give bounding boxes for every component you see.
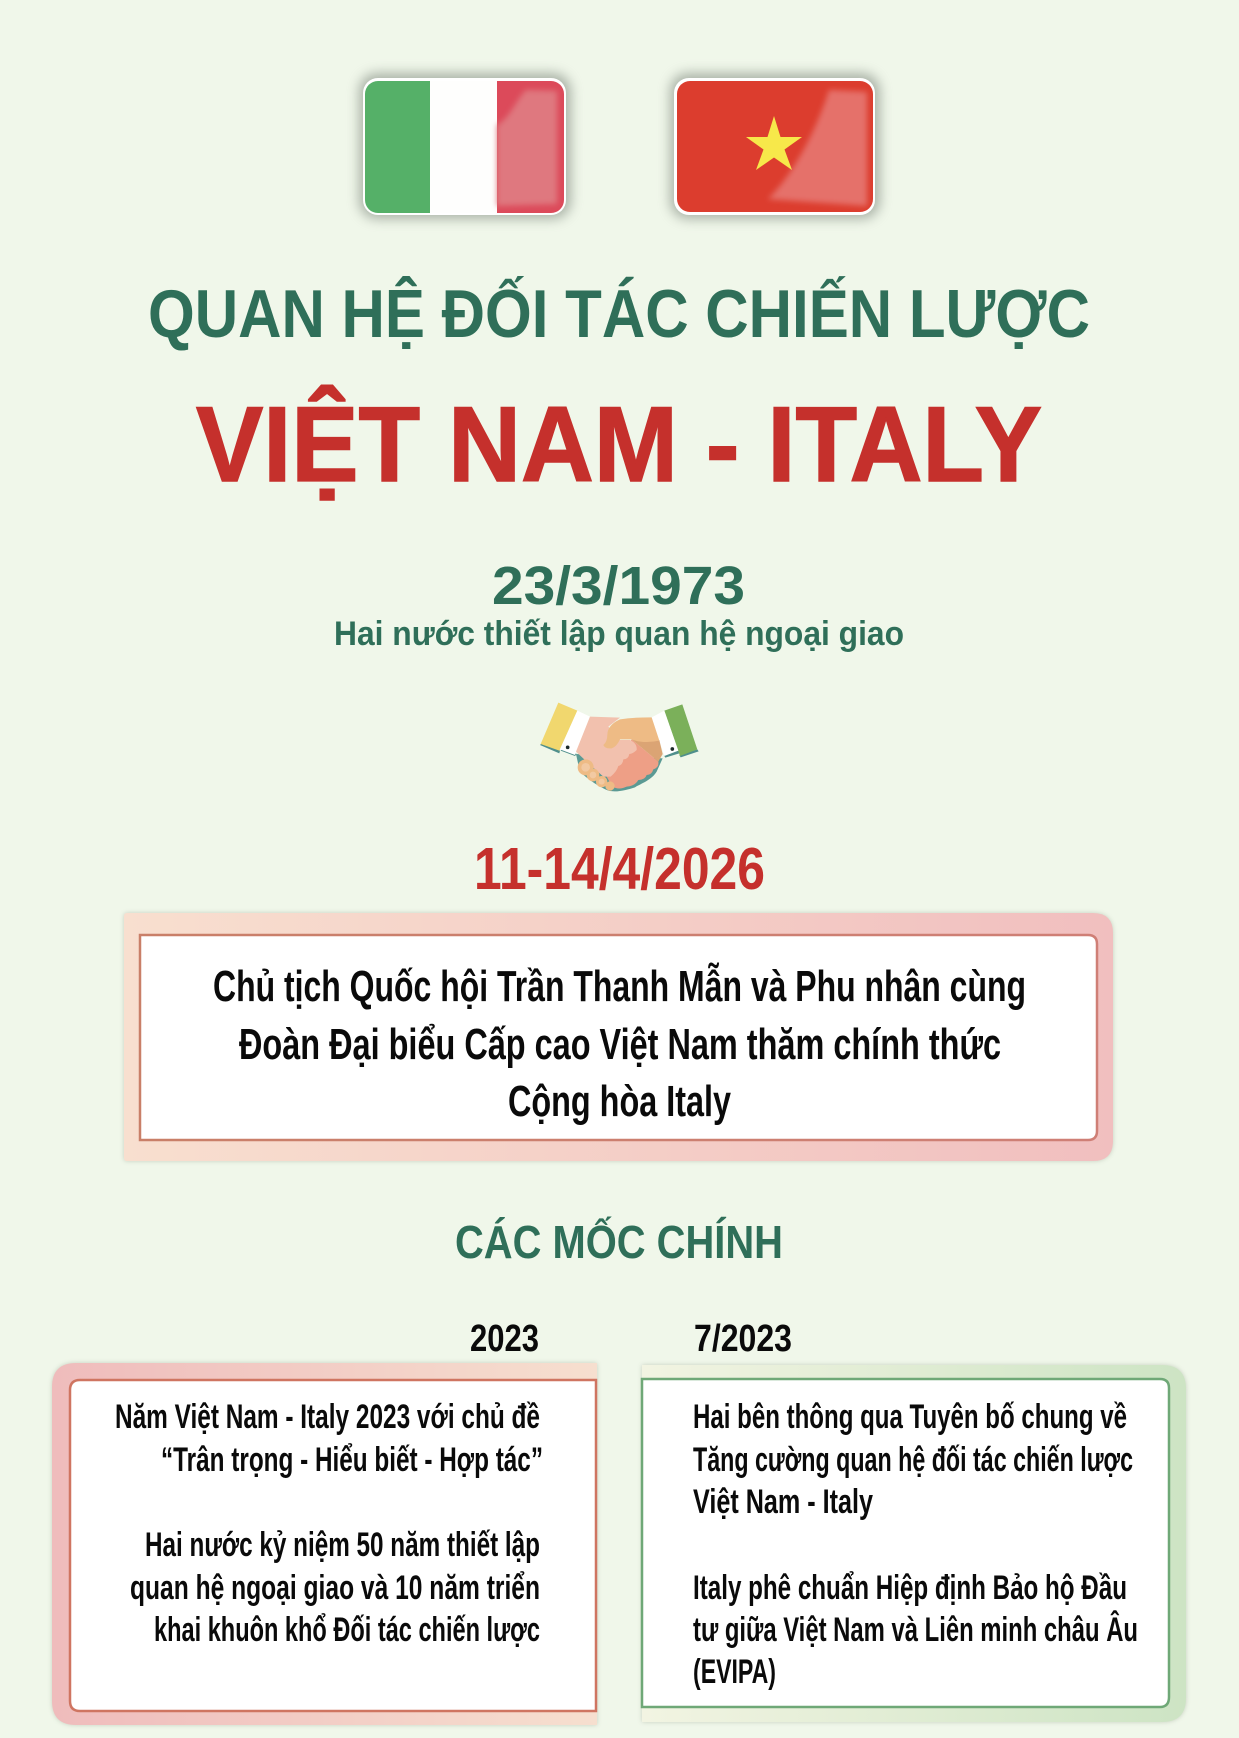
icon: Vietnam flag — [670, 73, 880, 219]
text: joint statement: Việt Nam - Italy — [693, 1483, 873, 1521]
panel: visit announcement — [124, 913, 1113, 1161]
text: 2023 anniversary: khai khuôn khổ Đối tác chiến lược — [154, 1611, 540, 1649]
heading: key milestones: CÁC MỐC CHÍNH — [455, 1216, 783, 1268]
panel: July 2023 milestone — [642, 1365, 1186, 1722]
text: 2023 anniversary — [130, 1526, 540, 1649]
title: partnership heading: QUAN HỆ ĐỐI TÁC CHIẾN LƯỢC — [148, 275, 1090, 352]
text: 2023 theme: “Trân trọng - Hiểu biết - Hợp tác” — [161, 1441, 543, 1479]
text: EVIPA ratification — [693, 1569, 1138, 1691]
text: EVIPA ratification: (EVIPA) — [693, 1653, 776, 1691]
icon: Italy flag — [359, 73, 571, 219]
text: 2023 theme: Năm Việt Nam - Italy 2023 với chủ đề — [115, 1398, 540, 1436]
date 2026: 11-14/4/2026 — [474, 836, 765, 902]
title: Viet Nam - Italy: VIỆT NAM - ITALY — [196, 384, 1042, 504]
date 1973: 23/3/1973 — [492, 556, 745, 616]
icon: handshake — [540, 703, 699, 791]
label: 2023: 2023 — [470, 1318, 539, 1360]
text: 2023 anniversary: quan hệ ngoại giao và 10 năm triển — [130, 1569, 540, 1607]
panel: 2023 milestone — [52, 1363, 597, 1725]
label: 7/2023: 7/2023 — [694, 1318, 792, 1360]
text: 2023 anniversary: Hai nước kỷ niệm 50 năm thiết lập — [145, 1526, 540, 1564]
icon: yellow star — [746, 116, 802, 170]
text: 2023 theme — [115, 1398, 543, 1479]
text: diplomatic relations established: Hai nước thiết lập quan hệ ngoại giao — [334, 615, 904, 653]
text: visit line 3: Cộng hòa Italy — [508, 1077, 731, 1126]
text: joint statement — [693, 1398, 1133, 1521]
